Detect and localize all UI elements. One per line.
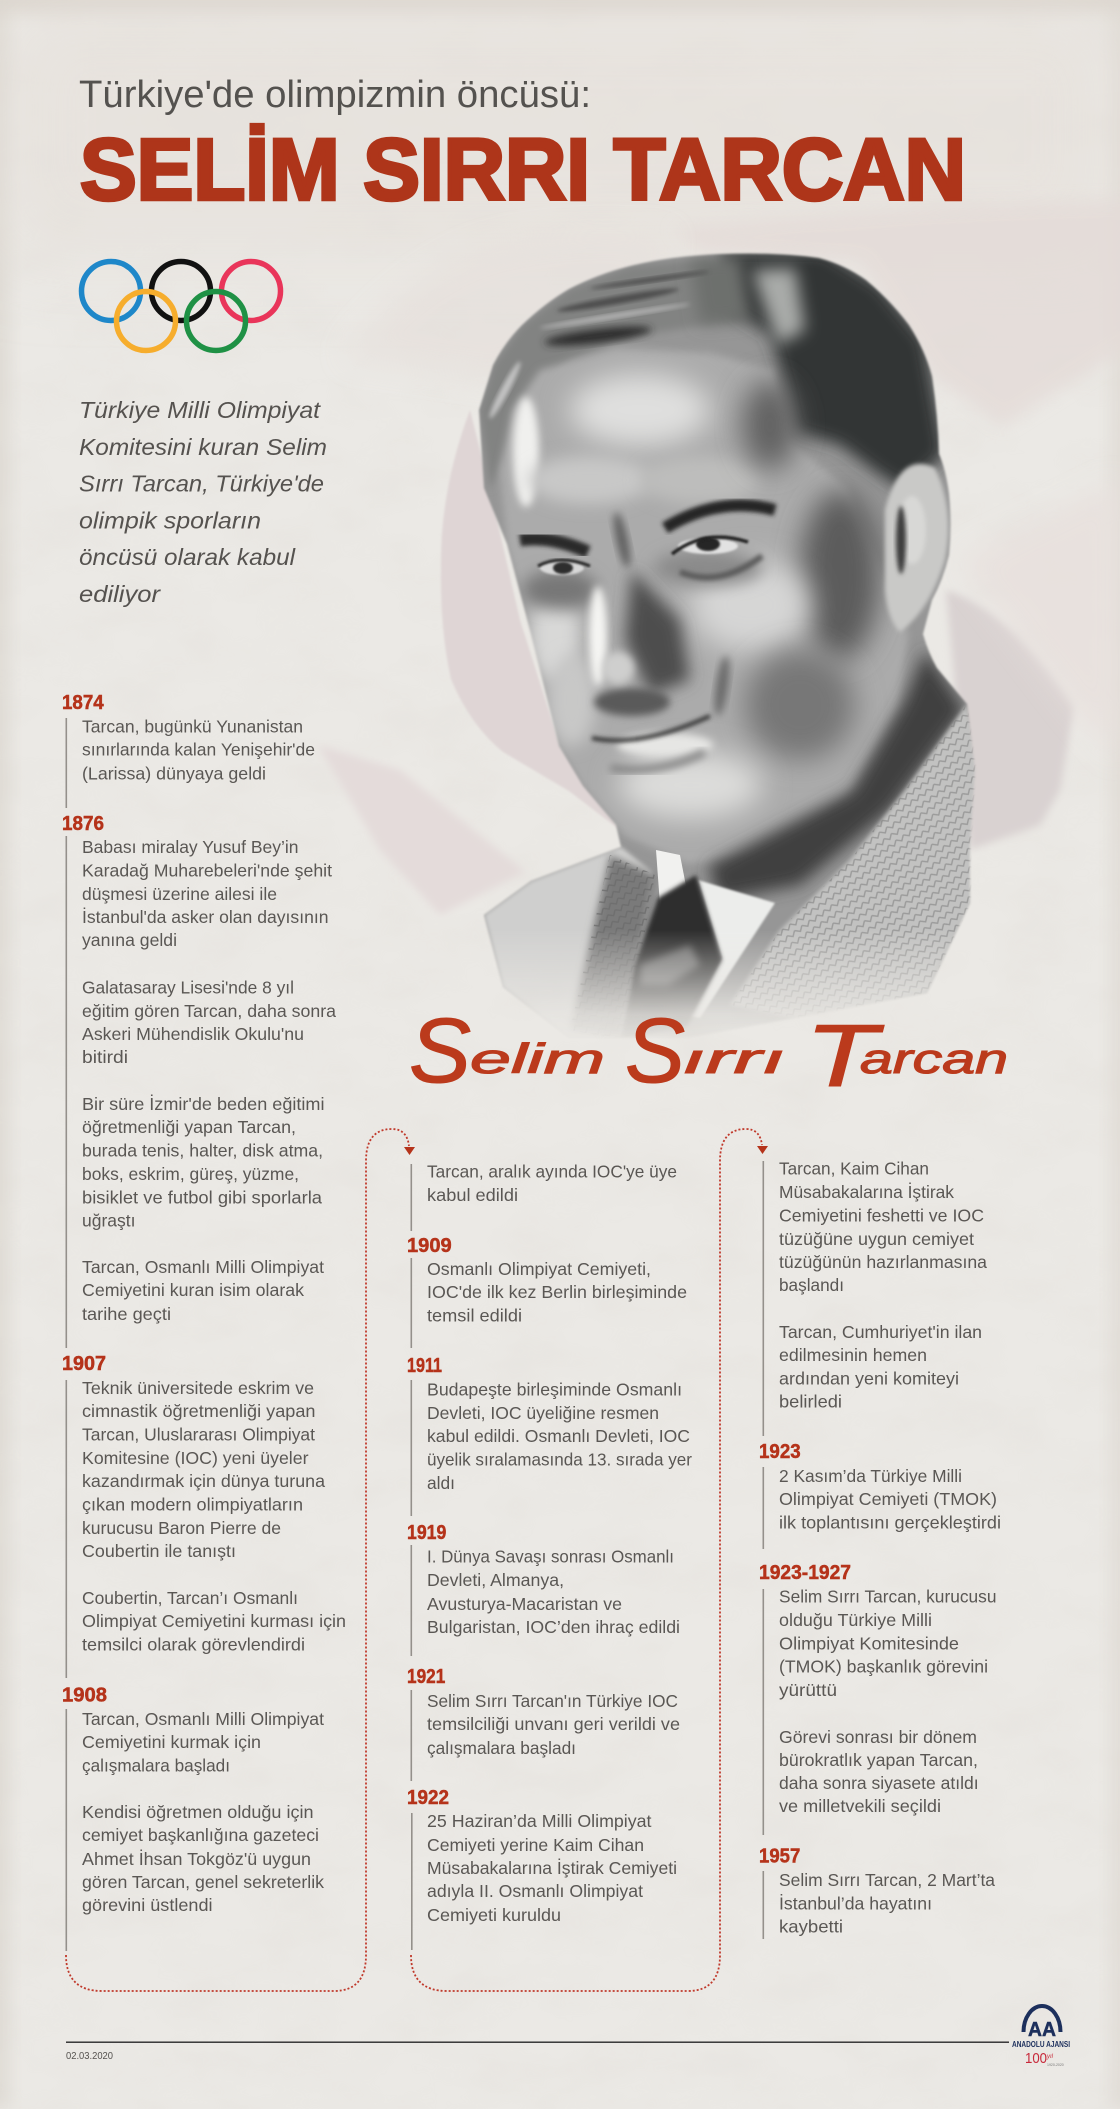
- entry 1919: Bulgaristan, IOC’den ihraç edildi: [427, 1617, 680, 1637]
- entry 1876: Tarcan, Osmanlı Milli Olimpiyat: [82, 1257, 324, 1277]
- entry 1919: I. Dünya Savaşı sonrası Osmanlı: [427, 1547, 674, 1567]
- entry 1874: (Larissa) dünyaya geldi: [82, 763, 266, 783]
- signature: [409, 1000, 1008, 1105]
- entry 1919: Devleti, Almanya,: [427, 1570, 564, 1590]
- entry 1919: Avusturya-Macaristan ve: [427, 1594, 622, 1614]
- entry 1923: Olimpiyat Cemiyeti (TMOK): [779, 1489, 997, 1509]
- signature: T: [805, 1006, 884, 1105]
- date: 02.03.2020: [66, 2051, 113, 2062]
- entry 1923-1927: Görevi sonrası bir dönem: [779, 1727, 977, 1747]
- entry 1907: Komitesine (IOC) yeni üyeler: [82, 1448, 309, 1468]
- entry 1957: kaybetti: [779, 1917, 843, 1937]
- entry 1907: temsilci olarak görevlendirdi: [82, 1634, 305, 1654]
- entry 1923-1927: yürüttü: [779, 1680, 837, 1700]
- entry 1876: 1876: [62, 812, 104, 835]
- entry 1876: düşmesi üzerine ailesi ile: [82, 884, 277, 904]
- logo: Anadolu Ajansi: [1012, 2006, 1070, 2067]
- logo: Anadolu Ajansi: 1920-2020: [1047, 2063, 1064, 2067]
- entry 1876: Askeri Mühendislik Okulu'nu: [82, 1024, 304, 1044]
- entry 1876: yanına geldi: [82, 930, 177, 950]
- entry 1923-1927: bürokratlık yapan Tarcan,: [779, 1750, 978, 1770]
- entry 1876: [62, 812, 336, 1348]
- entry 1876: Babası miralay Yusuf Bey’in: [82, 837, 298, 857]
- dotted connector 2 with arrow: [411, 1129, 768, 1991]
- entry 1911: Budapeşte birleşiminde Osmanlı: [427, 1380, 682, 1400]
- entry 1907: 1907: [62, 1352, 106, 1375]
- hair: [479, 250, 945, 490]
- entry 1957: Selim Sırrı Tarcan, 2 Mart’ta: [779, 1870, 995, 1890]
- entry 1922: 1922: [407, 1786, 449, 1809]
- entry 1907: çıkan modern olimpiyatların: [82, 1495, 303, 1515]
- subtitle: Türkiye'de olimpizmin öncüsü:: [79, 74, 591, 116]
- entry 1908 continued: kabul edildi: [427, 1185, 518, 1205]
- entry 1909: temsil edildi: [427, 1306, 522, 1326]
- intro text: ediliyor: [79, 581, 161, 607]
- entry 1876: eğitim gören Tarcan, daha sonra: [82, 1001, 336, 1021]
- entry 1876: boks, eskrim, güreş, yüzme,: [82, 1164, 299, 1184]
- intro text: Sırrı Tarcan, Türkiye'de: [79, 470, 324, 496]
- signature: arcan: [860, 1035, 1008, 1082]
- signature: ırrı: [682, 1035, 785, 1082]
- entry 1907: kurucusu Baron Pierre de: [82, 1518, 281, 1538]
- entry 1922 continued: edilmesinin hemen: [779, 1345, 927, 1365]
- entry 1909: 1909: [407, 1234, 452, 1257]
- intro text: Türkiye Milli Olimpiyat: [79, 397, 322, 423]
- entry 1874: Tarcan, bugünkü Yunanistan: [82, 716, 303, 736]
- entry 1923-1927: 1923-1927: [759, 1561, 851, 1584]
- entry 1874: sınırlarında kalan Yenişehir'de: [82, 740, 315, 760]
- entry 1911: [407, 1354, 692, 1516]
- entry 1911: üyelik sıralamasında 13. sırada yer: [427, 1450, 692, 1470]
- entry 1919: [407, 1521, 680, 1656]
- entry 1922 continued: Tarcan, Kaim Cihan: [779, 1159, 929, 1179]
- entry 1908: 1908: [62, 1684, 107, 1706]
- signature: elim: [470, 1035, 605, 1082]
- entry 1908: Ahmet İhsan Tokgöz'ü uygun: [82, 1849, 311, 1869]
- neck and jacket: [484, 650, 980, 1040]
- entry 1911: kabul edildi. Osmanlı Devleti, IOC: [427, 1426, 690, 1446]
- entry 1909: IOC'de ilk kez Berlin birleşiminde: [427, 1282, 687, 1302]
- entry 1876: Bir süre İzmir'de beden eğitimi: [82, 1094, 324, 1114]
- entry 1911: Devleti, IOC üyeliğine resmen: [427, 1403, 659, 1423]
- signature: S: [409, 1000, 471, 1102]
- entry 1907: Teknik üniversitede eskrim ve: [82, 1378, 314, 1398]
- entry 1922 continued: tüzüğünün hazırlanmasına: [779, 1252, 987, 1272]
- entry 1921: Selim Sırrı Tarcan'ın Türkiye IOC: [427, 1691, 678, 1711]
- entry 1911: 1911: [407, 1354, 442, 1377]
- entry 1908 continued: Tarcan, aralık ayında IOC'ye üye: [427, 1162, 677, 1182]
- entry 1923-1927: olduğu Türkiye Milli: [779, 1610, 932, 1630]
- entry 1922 continued: ardından yeni komiteyi: [779, 1368, 959, 1388]
- logo: Anadolu Ajansi: AA: [1028, 2019, 1056, 2041]
- entry 1923: ilk toplantısını gerçekleştirdi: [779, 1513, 1001, 1533]
- intro text: Komitesini kuran Selim: [79, 434, 327, 460]
- entry 1908 continued: [410, 1162, 677, 1231]
- entry 1874: [62, 691, 315, 808]
- signature: S: [625, 1000, 685, 1102]
- entry 1923-1927: ve milletvekili seçildi: [779, 1796, 941, 1816]
- face: [500, 348, 908, 864]
- entry 1922 continued: başlandı: [779, 1275, 844, 1295]
- entry 1876: Galatasaray Lisesi'nde 8 yıl: [82, 978, 294, 998]
- entry 1908: Tarcan, Osmanlı Milli Olimpiyat: [82, 1709, 324, 1729]
- entry 1922 continued: tüzüğüne uygun cemiyet: [779, 1229, 974, 1249]
- watermark: flag crescent and star: [318, 200, 1120, 915]
- entry 1923-1927: Selim Sırrı Tarcan, kurucusu: [779, 1587, 996, 1607]
- entry 1907: Coubertin, Tarcan’ı Osmanlı: [82, 1588, 298, 1608]
- entry 1907: kazandırmak için dünya turuna: [82, 1471, 325, 1491]
- ear: [885, 464, 948, 632]
- entry 1922 continued: Cemiyetini feshetti ve IOC: [779, 1206, 984, 1226]
- entry 1922: Cemiyeti yerine Kaim Cihan: [427, 1835, 644, 1855]
- entry 1908: [62, 1684, 324, 1951]
- entry 1907: [62, 1352, 346, 1678]
- entry 1876: öğretmenliği yapan Tarcan,: [82, 1117, 296, 1137]
- entry 1922 continued: belirledi: [779, 1392, 842, 1412]
- entry 1907: cimnastik öğretmenliği yapan: [82, 1401, 316, 1421]
- entry 1922: Cemiyeti kuruldu: [427, 1905, 561, 1925]
- footer rule: [66, 2042, 1009, 2043]
- entry 1908: görevini üstlendi: [82, 1895, 212, 1915]
- entry 1908: Kendisi öğretmen olduğu için: [82, 1802, 314, 1822]
- entry 1922: Müsabakalarına İştirak Cemiyeti: [427, 1858, 677, 1878]
- entry 1957: 1957: [759, 1845, 800, 1868]
- entry 1921: çalışmalara başladı: [427, 1738, 576, 1758]
- portrait: [470, 250, 990, 1050]
- entry 1922: adıyla II. Osmanlı Olimpiyat: [427, 1881, 643, 1901]
- entry 1876: bisiklet ve futbol gibi sporlarla: [82, 1188, 322, 1208]
- logo: Anadolu Ajansi: ANADOLU AJANSI: [1012, 2039, 1070, 2049]
- entry 1908: Cemiyetini kurmak için: [82, 1732, 261, 1752]
- entry 1922 continued: Müsabakalarına İştirak: [779, 1182, 954, 1202]
- entry 1923-1927: Olimpiyat Komitesinde: [779, 1634, 959, 1654]
- entry 1908: cemiyet başkanlığına gazeteci: [82, 1825, 319, 1845]
- entry 1907: Olimpiyat Cemiyetini kurması için: [82, 1611, 346, 1631]
- logo: Anadolu Ajansi: yıl: [1046, 2054, 1054, 2060]
- entry 1922: 25 Haziran’da Milli Olimpiyat: [427, 1811, 652, 1831]
- eyes: [538, 537, 762, 577]
- entry 1923: [759, 1440, 1001, 1549]
- entry 1923-1927: (TMOK) başkanlık görevini: [779, 1657, 988, 1677]
- entry 1907: Tarcan, Uluslararası Olimpiyat: [82, 1424, 315, 1444]
- logo: Anadolu Ajansi: 100: [1025, 2050, 1047, 2067]
- intro text: olimpik sporların: [79, 508, 261, 534]
- entry 1922 continued: [762, 1159, 987, 1436]
- entry 1907: Coubertin ile tanıştı: [82, 1541, 236, 1561]
- entry 1923-1927: daha sonra siyasete atıldı: [779, 1773, 979, 1793]
- entry 1923: 1923: [759, 1440, 801, 1463]
- entry 1876: Cemiyetini kuran isim olarak: [82, 1280, 304, 1300]
- entry 1908: çalışmalara başladı: [82, 1756, 230, 1776]
- entry 1909: [407, 1234, 687, 1348]
- entry 1909: Osmanlı Olimpiyat Cemiyeti,: [427, 1259, 651, 1279]
- entry 1923: 2 Kasım’da Türkiye Milli: [779, 1466, 962, 1486]
- entry 1876: burada tenis, halter, disk atma,: [82, 1141, 323, 1161]
- entry 1921: [407, 1665, 680, 1781]
- entry 1919: 1919: [407, 1521, 446, 1544]
- entry 1957: [759, 1845, 995, 1939]
- column 2: [407, 1162, 692, 1950]
- column 1: [62, 691, 346, 1951]
- entry 1876: bitirdi: [82, 1047, 128, 1067]
- entry 1923-1927: [759, 1561, 996, 1835]
- entry 1876: Karadağ Muharebeleri'nde şehit: [82, 861, 332, 881]
- entry 1876: uğraştı: [82, 1211, 136, 1231]
- entry 1911: aldı: [427, 1473, 455, 1493]
- entry 1908: gören Tarcan, genel sekreterlik: [82, 1872, 324, 1892]
- icon: olympic rings: [82, 262, 280, 350]
- entry 1921: temsilciliği unvanı geri verildi ve: [427, 1714, 680, 1734]
- entry 1921: 1921: [407, 1665, 445, 1688]
- intro text: [79, 397, 327, 607]
- entry 1957: İstanbul’da hayatını: [779, 1894, 932, 1914]
- column 3: [759, 1159, 1001, 1939]
- entry 1922 continued: Tarcan, Cumhuriyet'in ilan: [779, 1322, 982, 1342]
- entry 1922: [407, 1786, 677, 1950]
- entry 1876: İstanbul'da asker olan dayısının: [82, 907, 328, 927]
- title: SELİM SIRRI TARCAN: [80, 122, 966, 218]
- entry 1876: tarihe geçti: [82, 1304, 171, 1324]
- dotted connector 1 with arrow: [66, 1129, 415, 1991]
- entry 1874: 1874: [62, 691, 104, 714]
- intro text: öncüsü olarak kabul: [79, 544, 296, 570]
